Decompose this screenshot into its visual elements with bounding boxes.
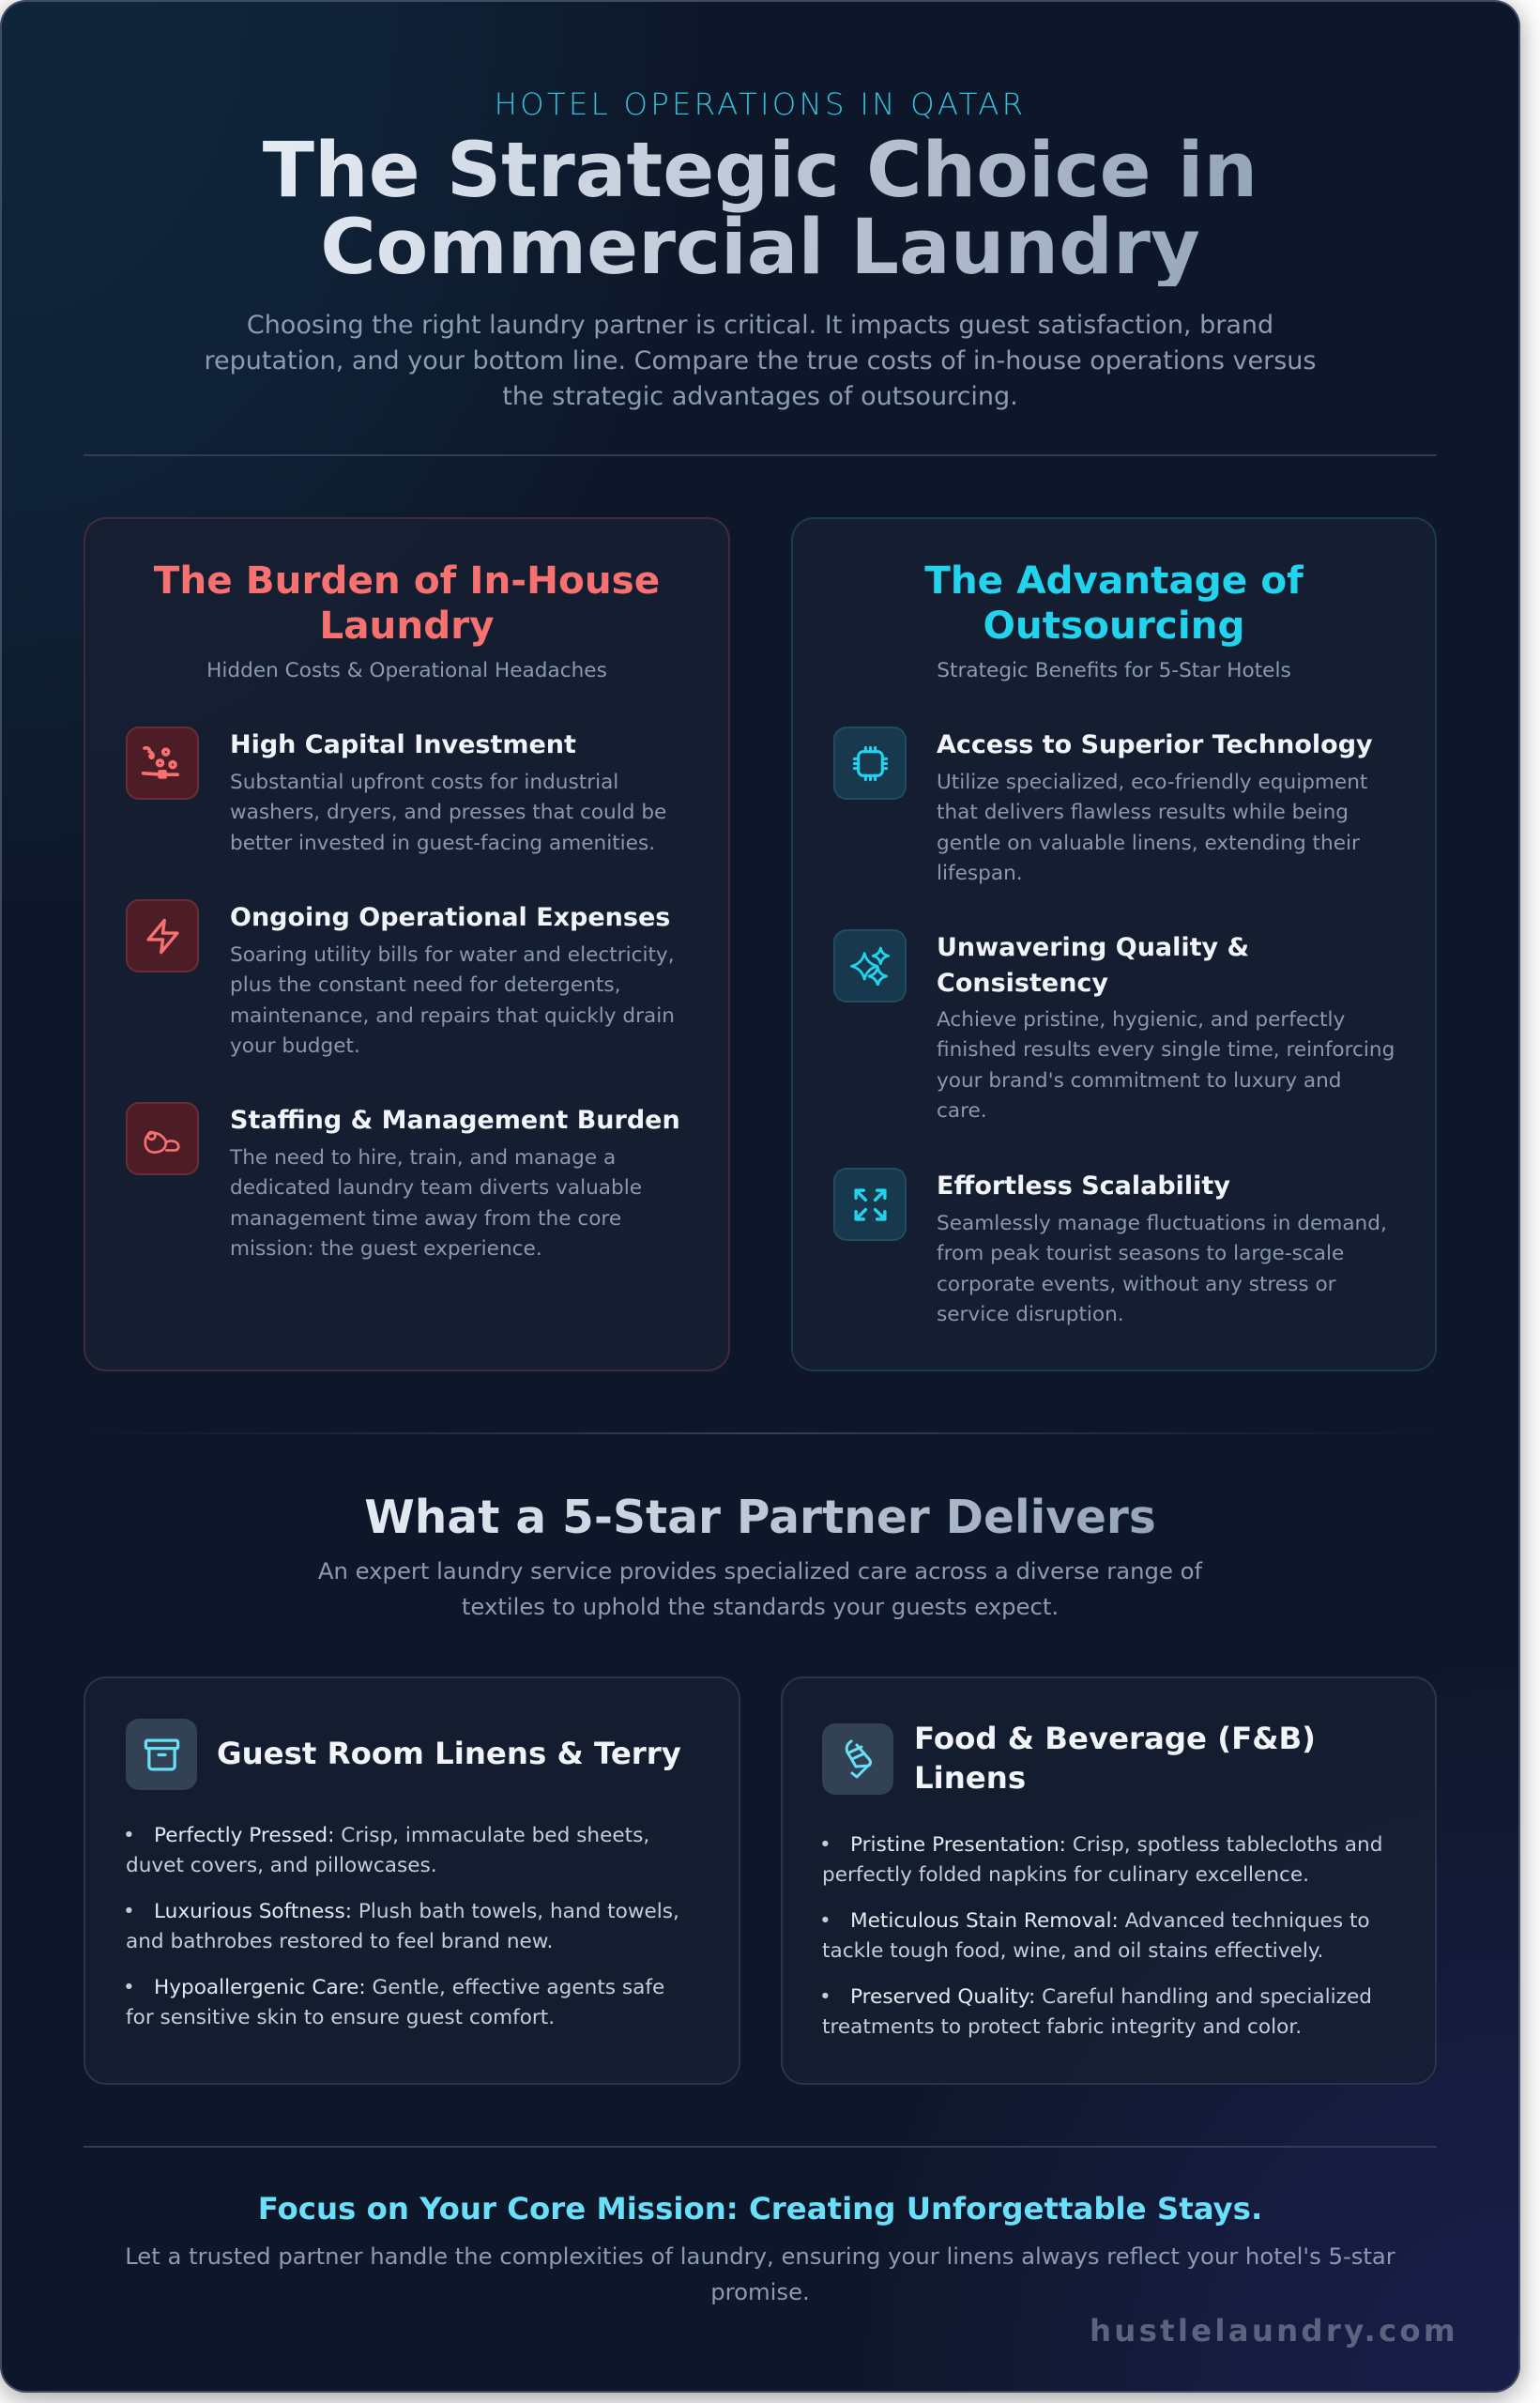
footer text: promise. [710,2278,810,2305]
item title: Unwavering Quality & [937,933,1249,962]
panel: guest room linens [84,1676,740,2085]
item text: Substantial upfront costs for industrial [230,771,618,794]
item text: lifespan. [937,862,1023,885]
item: superior technology [833,727,1373,885]
bullet: stain removal [819,1909,1370,1963]
card heading: Linens [914,1760,1026,1796]
card heading: Guest Room Linens & Terry [217,1736,681,1771]
item title [937,933,1249,998]
item text: care. [937,1099,987,1123]
item text: dedicated laundry team diverts valuable [230,1176,642,1200]
item title: Consistency [937,969,1108,998]
title [253,133,1267,286]
panel heading: burden [154,558,660,648]
item text: from peak tourist seasons to large-scale [937,1242,1344,1265]
item text [937,1008,1395,1123]
icon: chip [833,727,907,800]
bullet: hypoallergenic care: Hypoallergenic Care: Gentle, effective agents safe [154,1976,664,1999]
intro text [205,311,1316,411]
item text: maintenance, and repairs that quickly drain [230,1004,675,1028]
card heading: Food & Beverage (F&B) [914,1721,1316,1756]
intro text: the strategic advantages of outsourcing. [502,382,1018,411]
bullet list [819,1833,1382,2039]
item text [230,771,666,855]
watermark: hustlelaundry.com [1090,2313,1458,2349]
icon: archive box [126,1719,197,1790]
bullet: hypoallergenic care: • [123,1976,135,1999]
item title: Effortless Scalability [937,1171,1230,1201]
item title: High Capital Investment [230,730,576,759]
bullet: preserved quality: • [819,1985,831,2009]
item text: Utilize specialized, eco-friendly equipment [937,771,1367,794]
bullet: pristine presentation [819,1833,1382,1887]
item text: corporate events, without any stress or [937,1273,1336,1296]
item title: Ongoing Operational Expenses [230,903,670,932]
bullet: pristine presentation: Pristine Presentation: Crisp, spotless tablecloths and [850,1833,1382,1857]
bullet: preserved quality: treatments to protect fabric integrity and color. [822,2015,1302,2039]
panel heading: advantage [924,558,1304,648]
section intro [318,1557,1203,1620]
item text [230,943,675,1058]
section intro: An expert laundry service provides specialized care across a diverse range of [318,1557,1202,1584]
item: quality and consistency [833,929,1395,1123]
item text: your brand's commitment to luxury and [937,1069,1341,1093]
bullet: luxurious softness: and bathrobes restored to feel brand new. [126,1930,553,1953]
bullet: perfectly pressed: • [123,1824,135,1847]
icon: lightning bolt [126,899,199,972]
section intro: textiles to uphold the standards your guests expect. [462,1593,1059,1620]
bullet: stain removal: tackle tough food, wine, and oil stains effectively. [822,1939,1323,1963]
panel: food and beverage linens [781,1676,1437,2085]
section heading: What a 5-Star Partner Delivers [364,1492,1156,1544]
item text: your budget. [230,1034,360,1058]
bullet: stain removal: Meticulous Stain Removal: Advanced techniques to [850,1909,1370,1933]
icon: coins cluster [126,727,199,800]
item text: management time away from the core [230,1207,621,1231]
bullet: stain removal: • [819,1909,831,1933]
item text: mission: the guest experience. [230,1237,542,1261]
footer text [125,2242,1395,2305]
bullet: luxurious softness: • [123,1900,135,1923]
bullet: perfectly pressed [123,1824,649,1877]
item text: plus the constant need for detergents, [230,973,620,997]
bullet list [123,1824,679,2029]
panel: burden of in-house laundry [84,517,730,1371]
item text: The need to hire, train, and manage a [230,1146,616,1170]
item: ongoing operational expenses [126,899,675,1058]
item text: finished results every single time, reinforcing [937,1038,1395,1062]
item text: Seamlessly manage fluctuations in demand, [937,1212,1387,1235]
item title: Staffing & Management Burden [230,1106,680,1135]
bullet: preserved quality [819,1985,1372,2039]
intro text: reputation, and your bottom line. Compare the true costs of in-house operations versus [205,346,1316,375]
item title: Access to Superior Technology [937,730,1373,759]
item: high capital investment [126,727,666,855]
footer text: Let a trusted partner handle the complexities of laundry, ensuring your linens always reflect your hotel's 5-star [125,2242,1395,2270]
icon: sparkles [833,929,907,1003]
item text [937,1212,1387,1326]
bullet: luxurious softness: Luxurious Softness: Plush bath towels, hand towels, [154,1900,679,1923]
icon: expand arrows [833,1168,907,1241]
panel subtitle: burden: Hidden Costs & Operational Headaches [206,659,607,682]
bullet: pristine presentation: perfectly folded napkins for culinary excellence. [822,1863,1309,1887]
item text: better invested in guest-facing amenities. [230,832,655,855]
item text [937,771,1367,885]
bullet: hypoallergenic care: for sensitive skin to ensure guest comfort. [126,2006,555,2029]
item text: that delivers flawless results while being [937,801,1349,824]
panel heading: burden: Laundry [319,603,495,648]
item text: Achieve pristine, hygienic, and perfectly [937,1008,1345,1032]
bullet: luxurious softness [123,1900,679,1953]
item text: washers, dryers, and presses that could be [230,801,666,824]
panel: advantage of outsourcing [791,517,1437,1371]
item: staffing and management burden [126,1102,680,1261]
item text: service disruption. [937,1303,1124,1326]
intro text: Choosing the right laundry partner is critical. It impacts guest satisfaction, brand [247,311,1273,340]
panel heading: burden: The Burden of In-House [154,558,660,603]
item text: gentle on valuable linens, extending their [937,832,1360,855]
panel subtitle: advantage: Strategic Benefits for 5-Star Hotels [937,659,1291,682]
bullet: pristine presentation: • [819,1833,831,1857]
icon: staff blob [126,1102,199,1175]
bullet: perfectly pressed: duvet covers, and pillowcases. [126,1854,437,1877]
bullet: hypoallergenic care [123,1976,664,2029]
panel heading: advantage: The Advantage of [924,558,1304,603]
icon: folded napkin [822,1723,893,1795]
panel heading: advantage: Outsourcing [983,603,1245,648]
bullet: perfectly pressed: Perfectly Pressed: Crisp, immaculate bed sheets, [154,1824,649,1847]
footer heading: Focus on Your Core Mission: Creating Unforgettable Stays. [258,2191,1262,2227]
item text: Soaring utility bills for water and electricity, [230,943,675,967]
item: effortless scalability [833,1168,1387,1326]
title: Commercial Laundry [320,204,1200,292]
item text [229,1146,642,1261]
title: The Strategic Choice in [263,127,1258,215]
card heading [914,1721,1316,1796]
bullet: preserved quality: Preserved Quality: Careful handling and specialized [850,1985,1372,2009]
eyebrow: HOTEL OPERATIONS IN QATAR [495,86,1026,122]
